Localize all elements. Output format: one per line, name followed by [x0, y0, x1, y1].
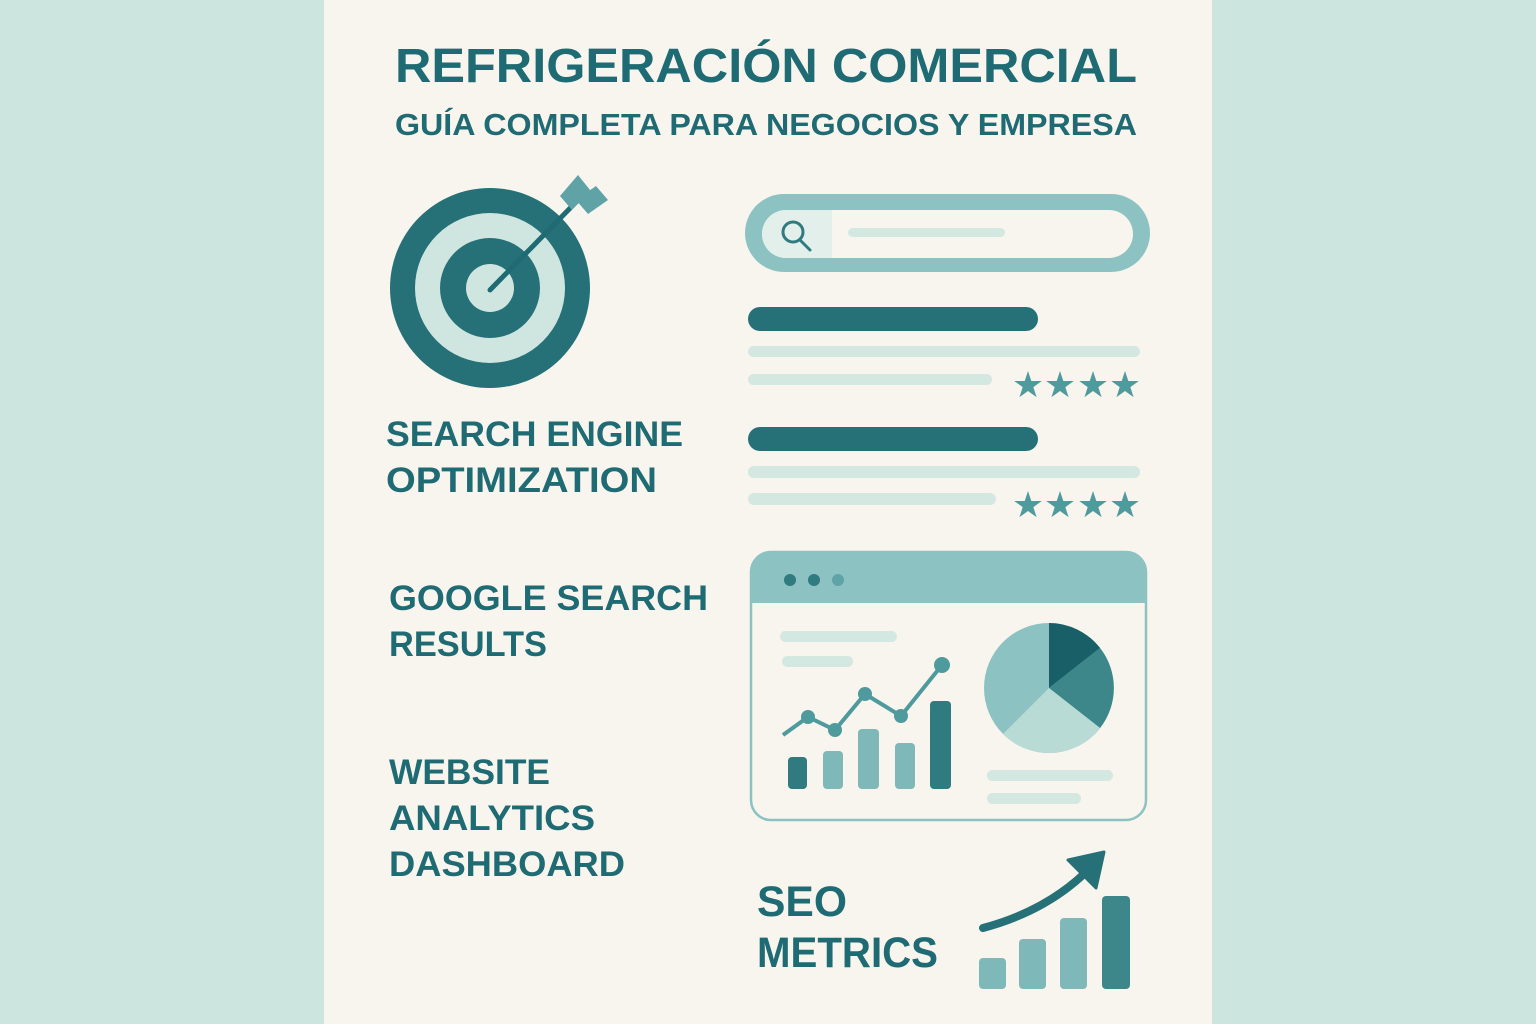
search result 2: [748, 427, 1141, 525]
label: website analytics dashboard: WEBSITE: [389, 753, 550, 792]
arrow: [983, 852, 1104, 928]
label: google search results: [389, 579, 708, 664]
search result 2: ★: [1109, 484, 1141, 525]
title: REFRIGERACIÓN COMERCIAL: [395, 38, 1137, 93]
search result 2: ★: [1077, 484, 1109, 525]
label: seo metrics: METRICS: [757, 929, 938, 977]
icon: target with arrow: [390, 175, 608, 388]
chart: bars and line: [783, 657, 951, 789]
label: seo metrics: SEO: [757, 878, 847, 926]
search result 1: ★: [1109, 364, 1141, 405]
label: website analytics dashboard: ANALYTICS: [389, 799, 595, 838]
dashboard window: [751, 552, 1146, 820]
search result 1: ★: [1044, 364, 1076, 405]
search bar: [745, 194, 1150, 272]
icon: growth bar chart with arrow: [979, 852, 1130, 989]
label: google search results: RESULTS: [389, 625, 547, 664]
panel: center page: [324, 0, 1212, 1024]
label: search engine optimization: SEARCH ENGINE: [386, 415, 683, 454]
label: website analytics dashboard: [389, 753, 625, 884]
search result 2: ★: [1044, 484, 1076, 525]
search result 1: [748, 307, 1141, 405]
label: website analytics dashboard: DASHBOARD: [389, 845, 625, 884]
chart: pie: [984, 623, 1114, 753]
icon: magnifier: [783, 222, 810, 250]
label: search engine optimization: [386, 415, 683, 500]
search result 2: ★: [1012, 484, 1044, 525]
subtitle: GUÍA COMPLETA PARA NEGOCIOS Y EMPRESA: [395, 107, 1137, 142]
label: google search results: GOOGLE SEARCH: [389, 579, 708, 618]
label: seo metrics: [757, 878, 938, 977]
label: search engine optimization: OPTIMIZATION: [386, 461, 657, 500]
search result 1: ★: [1077, 364, 1109, 405]
search result 1: ★: [1012, 364, 1044, 405]
